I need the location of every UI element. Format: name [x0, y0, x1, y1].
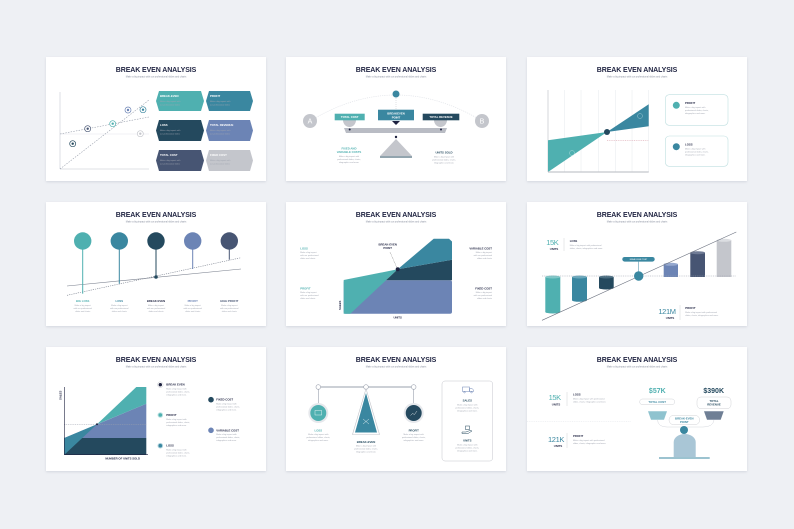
labels: with our professional: [220, 307, 239, 310]
icon: loss circle: [308, 403, 328, 423]
side box: sales and units: professional slides, charts,: [456, 406, 480, 410]
slide 2: balance scale: [286, 57, 506, 181]
label: total cost: [335, 114, 365, 120]
legend: variable cost: infographics and more.: [216, 440, 237, 442]
text: profit: PROFIT: [300, 286, 311, 290]
text: fixed and variable costs: infographics and more.: [339, 162, 360, 164]
card: profit: professional slides, charts,: [685, 109, 709, 112]
stat: 121K profit: PROFIT: [573, 434, 584, 438]
stat: 121M profit: PROFIT: [685, 306, 696, 310]
icon: truck: [462, 387, 474, 393]
text: units sold: Make a big impact with: [434, 156, 454, 158]
value: $390K total revenue: $390K: [703, 388, 724, 395]
stat: 121M profit: Make a big impact with professional: [685, 311, 718, 314]
legend: profit: PROFIT: [166, 413, 177, 417]
side box: sales and units: [442, 381, 493, 461]
text: fixed and variable costs: [337, 146, 361, 164]
subtitle: Make a big impact with our professional slides and charts: [366, 76, 427, 78]
break-even lines: [542, 232, 736, 320]
value: $57K total cost: $57K: [649, 388, 666, 395]
legend: break even: infographics and more.: [166, 394, 187, 396]
break-even point label: BREAK-EVEN: [378, 242, 397, 246]
text: profit: [402, 428, 426, 442]
legend: break even: BREAK EVEN: [166, 383, 185, 387]
text: loss: [307, 428, 331, 442]
labels: LOSS: [115, 299, 123, 303]
labels: BIG LOSS: [76, 299, 90, 303]
axis labels: SALES: [338, 301, 342, 310]
text: profit: Make a big impact: [300, 291, 317, 294]
legend: profit: infographics and more.: [166, 425, 187, 427]
lines: [67, 258, 241, 295]
side box: sales and units: SALES: [463, 398, 472, 402]
axis labels: SALES: [58, 391, 62, 400]
pin: break even: [147, 232, 165, 279]
card: fixed cost: FIXED COST: [210, 153, 227, 157]
card: total cost: our professional slides: [160, 164, 180, 166]
label: breakeven point: BREAKEVEN: [387, 111, 405, 115]
title: BREAK EVEN ANALYSIS: [116, 67, 197, 74]
label: total revenue: TOTAL REVENUE: [429, 115, 453, 119]
legend: fixed cost: professional slides, charts,: [216, 406, 240, 408]
card: profit: [206, 91, 253, 111]
chart: [344, 239, 452, 314]
break-even marker: BREAK EVEN POINT: [630, 258, 648, 261]
text: loss: Make a big impact: [300, 251, 317, 254]
stat: 121K profit: 121K: [548, 435, 564, 444]
labels: HIGH PROFIT: [220, 299, 239, 303]
value: $57K total cost: TOTAL COST: [648, 400, 666, 404]
axis labels: [338, 301, 402, 320]
circle B: [475, 114, 489, 128]
legend: profit: Make a big impact with: [166, 418, 187, 421]
text: variable cost: VARIABLE COST: [469, 246, 492, 250]
slide 8: hanging balance: [286, 347, 506, 471]
labels: PROFIT: [188, 299, 198, 303]
label: total cost: TOTAL COST: [341, 115, 359, 119]
text: fixed and variable costs: FIXED AND: [342, 146, 356, 150]
labels: [74, 299, 239, 313]
text: variable cost: with our professional: [474, 254, 493, 257]
slide 1: hexagon cards and line chart: [46, 57, 266, 181]
line chart: [60, 92, 149, 169]
axis labels: [58, 391, 140, 460]
side box: sales and units: infographics and more.: [457, 410, 478, 412]
card: loss: LOSS: [160, 123, 168, 127]
text: profit: professional slides, charts,: [402, 436, 426, 439]
icon: hand with box: [462, 426, 472, 434]
break-even point label: [378, 242, 397, 250]
legend: profit: [158, 412, 190, 427]
labels: slides and charts: [75, 310, 90, 313]
text: units sold: UNITS SOLD: [436, 151, 452, 155]
label: total revenue: [423, 114, 459, 120]
text: loss: LOSS: [314, 428, 322, 432]
stat: 15K loss: [549, 392, 607, 406]
slide 3: area chart with profit/loss cards: [527, 57, 747, 181]
text: loss: infographics and more.: [308, 440, 329, 442]
stat: 121M profit: UNITS: [666, 316, 674, 320]
label: breakeven point: [378, 110, 414, 125]
text: variable cost: slides and charts: [477, 257, 492, 260]
card: total revenue: [206, 120, 253, 141]
labels: with our professional: [184, 307, 202, 310]
card: profit: [665, 95, 728, 125]
chart: [64, 387, 148, 455]
card: break-even: our professional slides: [160, 104, 180, 106]
circle B: B: [480, 118, 485, 126]
text: units sold: [432, 151, 456, 164]
text: break-even: [354, 440, 378, 454]
card: loss: Make a big impact with: [160, 129, 180, 132]
card: total cost: [156, 150, 204, 171]
pin: loss: [111, 232, 128, 284]
labels: slides and charts: [112, 310, 127, 313]
card: loss: Make a big impact with: [685, 147, 705, 150]
side box: sales and units: UNITS: [463, 438, 472, 442]
legend: loss: [158, 443, 190, 458]
card: total cost: Make a big impact with: [160, 159, 180, 162]
labels: Make a big impact: [185, 304, 201, 307]
title: BREAK EVEN ANALYSIS: [116, 357, 197, 364]
card: break-even: BREAK-EVEN: [160, 94, 178, 98]
circle A: A: [308, 118, 313, 126]
legend: break even: Make a big impact with: [166, 388, 187, 390]
stat: 121M profit: 121M: [658, 307, 676, 316]
legend: loss: Make a big impact with: [166, 448, 187, 452]
slide 7: stacked area chart with legend: [46, 347, 266, 471]
break-even point label: POINT: [383, 246, 392, 250]
legend: loss: professional slides, charts,: [166, 452, 190, 454]
card: total revenue: TOTAL REVENUE: [210, 123, 233, 127]
card: loss: [156, 120, 204, 141]
value: $57K total cost: [640, 388, 675, 405]
legend: variable cost: [208, 428, 240, 442]
text: fixed cost: Make a big impact: [476, 291, 492, 294]
card: fixed cost: our professional slides: [210, 164, 230, 166]
subtitle: Make a big impact with our professional slides and charts: [126, 76, 187, 78]
title: BREAK EVEN ANALYSIS: [597, 212, 678, 219]
labels: Make a big impact: [221, 304, 238, 307]
bowls: [343, 120, 447, 127]
axis labels: UNITS: [393, 316, 402, 320]
card: total cost: TOTAL COST: [160, 153, 178, 157]
axis labels: NUMBER OF UNITS SOLD: [105, 456, 140, 460]
text: loss: slides and charts: [300, 257, 315, 260]
legend: fixed cost: FIXED COST: [216, 398, 233, 402]
subtitle: Make a big impact with our professional slides and charts: [607, 366, 668, 368]
text: loss: with our professional: [300, 254, 319, 257]
legend: fixed cost: infographics and more.: [216, 410, 237, 412]
title: BREAK EVEN ANALYSIS: [356, 67, 437, 74]
card: profit: infographics and more.: [685, 113, 706, 115]
stat: 15K loss: slides, charts, infographics and more.: [570, 247, 603, 250]
stat: 15K loss: slides, charts, infographics and more.: [573, 400, 607, 404]
icon: break-even triangle: [352, 389, 380, 434]
labels: Make a big impact: [111, 304, 128, 307]
title: BREAK EVEN ANALYSIS: [356, 212, 437, 219]
text: profit: PROFIT: [409, 428, 419, 432]
card: profit: Make a big impact with: [685, 106, 705, 109]
card: profit: Make a big impact with: [210, 100, 230, 103]
subtitle: Make a big impact with our professional slides and charts: [607, 76, 668, 78]
card: total revenue: Make a big impact with: [210, 129, 230, 132]
legend: variable cost: professional slides, charts,: [216, 436, 240, 439]
stat: 15K loss: Make a big impact with professional: [573, 398, 605, 400]
legend: profit: professional slides, charts,: [166, 421, 190, 424]
text: variable cost: [469, 246, 493, 260]
top pivot: [392, 90, 400, 109]
stat: 15K loss: LOSS: [570, 239, 577, 243]
stat: 121K profit: slides, charts, infographics and more.: [573, 442, 607, 445]
labels: with our professional: [147, 307, 166, 310]
side box: sales and units: infographics and more.: [457, 450, 478, 452]
card: loss: LOSS: [685, 142, 693, 146]
legend: fixed cost: Make a big impact with: [216, 402, 237, 406]
stat: 15K loss: [546, 238, 603, 251]
labels: slides and charts: [222, 310, 237, 313]
card: profit: PROFIT: [210, 94, 221, 98]
subtitle: Make a big impact with our professional slides and charts: [366, 220, 427, 224]
icon: profit circle: [404, 403, 424, 423]
side box: sales and units: Make a big impact with: [457, 444, 477, 446]
labels: BREAK EVEN: [147, 299, 165, 303]
label: breakeven point: POINT: [392, 115, 401, 119]
stat: 121K profit: [548, 433, 607, 448]
labels: with our professional: [110, 307, 129, 310]
value: $390K total revenue: REVENUE: [707, 402, 721, 406]
stat: 121M profit: slides, charts, infographics and more.: [685, 314, 719, 317]
subtitle: Make a big impact with our professional slides and charts: [126, 220, 187, 224]
card: fixed cost: Make a big impact with: [210, 159, 230, 162]
stat: 15K loss: 15K: [549, 393, 561, 402]
legend: break even: professional slides, charts,: [166, 390, 190, 394]
card: profit: PROFIT: [685, 101, 696, 105]
text: break-even: infographics and more.: [356, 452, 377, 454]
card: loss: our professional slides: [160, 134, 180, 136]
title: BREAK EVEN ANALYSIS: [116, 212, 197, 219]
pin: high profit: [221, 232, 238, 260]
stat: 121K profit: Make a big impact with professional: [573, 439, 605, 442]
stat: 15K loss: UNITS: [552, 402, 560, 406]
text: fixed cost: [474, 286, 493, 300]
arc: [310, 95, 482, 121]
text: units sold: infographics and more.: [434, 162, 455, 164]
text: break-even: Make a big impact with: [356, 445, 376, 448]
text: profit: [300, 286, 319, 300]
scale: POINT: [680, 420, 689, 424]
legend: variable cost: VARIABLE COST: [216, 428, 239, 432]
stat: 15K loss: UNITS: [550, 247, 558, 251]
labels: Make a big impact: [148, 304, 165, 307]
text: profit: with our professional: [300, 294, 319, 297]
card: loss: [665, 136, 728, 166]
legend: fixed cost: [208, 397, 240, 412]
text: fixed cost: FIXED COST: [475, 286, 492, 290]
text: fixed cost: slides and charts: [477, 297, 492, 300]
text: break-even: BREAK-EVEN: [357, 440, 375, 444]
chart: [548, 90, 649, 172]
text: profit: infographics and more.: [404, 440, 424, 442]
slide 6: cylinder bars: [527, 202, 747, 326]
title: BREAK EVEN ANALYSIS: [597, 67, 678, 74]
pin: big loss: [74, 232, 91, 294]
side box: sales and units: professional slides, charts,: [456, 446, 480, 450]
title: BREAK EVEN ANALYSIS: [597, 357, 678, 364]
legend: loss: infographics and more.: [166, 456, 187, 458]
stat: 121M profit: [658, 305, 719, 320]
stat: 15K loss: LOSS: [573, 392, 581, 396]
text: break-even: professional slides, charts,: [354, 448, 378, 451]
card: break-even: Make a big impact with: [160, 100, 180, 103]
text: fixed and variable costs: professional slides, charts,: [337, 158, 361, 161]
text: variable cost: Make a big impact: [476, 251, 492, 254]
slide 5: break-even area chart: [286, 202, 506, 326]
card: loss: professional slides, charts,: [685, 150, 709, 153]
stat: 121K profit: UNITS: [554, 444, 562, 448]
text: fixed cost: with our professional: [474, 294, 493, 297]
text: loss: LOSS: [300, 246, 308, 250]
break-even marker: [622, 257, 655, 281]
subtitle: Make a big impact with our professional slides and charts: [126, 366, 187, 368]
labels: with our professional: [74, 307, 92, 310]
scale beam and base: [344, 128, 447, 157]
stat: 15K loss: 15K: [546, 238, 559, 247]
cylinders: [545, 239, 731, 314]
labels: slides and charts: [185, 310, 200, 313]
scale: [648, 411, 724, 458]
scale: BREAK-EVEN: [675, 416, 694, 420]
labels: Make a big impact: [75, 304, 91, 307]
text: loss: Make a big impact with: [308, 433, 328, 436]
card: profit: our professional slides: [210, 104, 230, 106]
card: total revenue: our professional slides: [210, 134, 230, 136]
pin: profit: [184, 232, 201, 269]
subtitle: Make a big impact with our professional slides and charts: [607, 220, 668, 224]
side box: sales and units: Make a big impact with: [457, 404, 477, 406]
slide 4: pin circles timeline: [46, 202, 266, 326]
text: loss: [300, 246, 319, 260]
text: units sold: professional slides, charts,: [432, 158, 456, 162]
text: fixed and variable costs: VARIABLE COSTS: [337, 150, 361, 154]
subtitle: Make a big impact with our professional slides and charts: [366, 366, 427, 368]
card: fixed cost: [206, 150, 253, 171]
labels: slides and charts: [148, 310, 164, 313]
beam: [316, 385, 416, 405]
title: BREAK EVEN ANALYSIS: [356, 357, 437, 364]
text: profit: slides and charts: [300, 297, 315, 300]
card: loss: infographics and more.: [685, 154, 706, 156]
card: break-even: [156, 91, 204, 111]
text: loss: professional slides, charts,: [307, 436, 331, 439]
text: profit: Make a big impact with: [404, 433, 424, 436]
slide 9: stats with scale: [527, 347, 747, 471]
value: $390K total revenue: [697, 388, 731, 409]
value: $390K total revenue: TOTAL: [709, 399, 719, 403]
circle A: [303, 114, 317, 128]
divider: [527, 420, 631, 422]
legend: variable cost: Make a big impact with: [216, 433, 237, 436]
legend: break even: [158, 382, 190, 396]
stat: 15K loss: Make a big impact with professional: [570, 244, 602, 247]
legend: loss: LOSS: [166, 444, 174, 448]
text: fixed and variable costs: Make a big impact with: [339, 155, 359, 158]
